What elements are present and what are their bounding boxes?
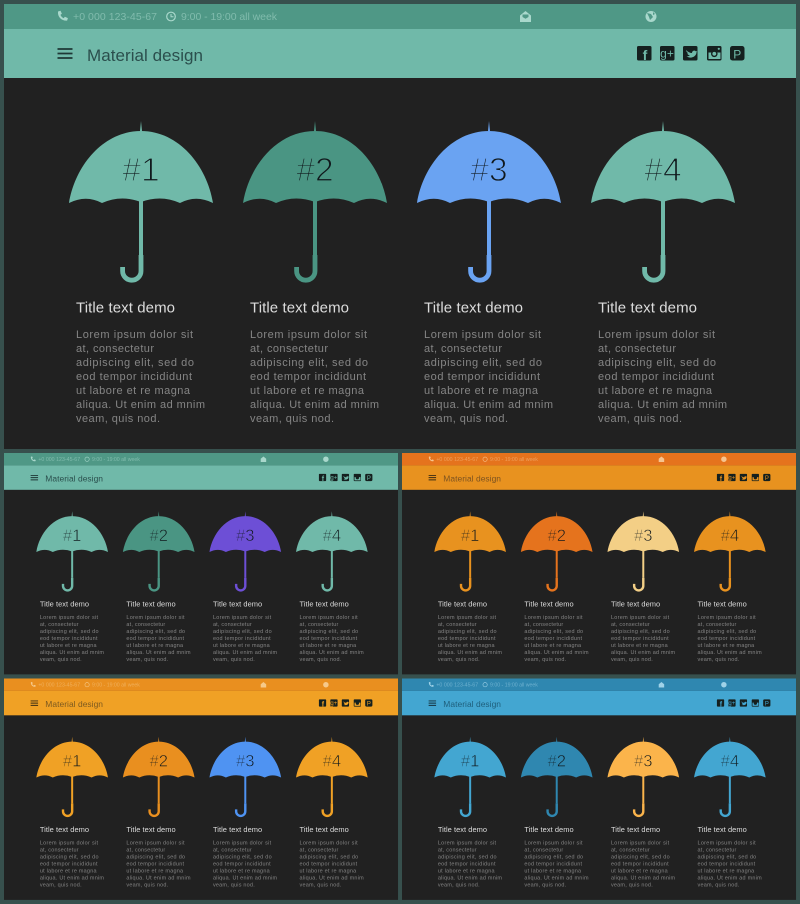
text block 1: at, consectetur (76, 343, 154, 355)
text block 4: adipiscing elit, sed do (698, 629, 756, 635)
text block 3: ut labore et re magna (213, 869, 271, 875)
text block 1: eod tempor incididunt (438, 636, 496, 642)
text block 1: Title text demo (40, 825, 89, 834)
text block 3: ut labore et re magna (213, 643, 271, 649)
text block 4: ut labore et re magna (698, 869, 755, 875)
app bar (402, 691, 796, 715)
text block 3: Lorem ipsum dolor sit (611, 841, 670, 847)
text block 2: eod tempor incididunt (250, 371, 366, 383)
text block 3: Title text demo (611, 825, 660, 834)
text block 4: veam, quis nod. (598, 413, 682, 425)
text block 4: ut labore et re magna (698, 643, 755, 649)
umbrella #3 (209, 511, 281, 590)
text block 2 (126, 825, 191, 888)
text block 4: at, consectetur (300, 848, 338, 854)
text block 3 (213, 825, 278, 888)
contact strip: +0 000 123-45-67 (38, 457, 80, 463)
text block 2: adipiscing elit, sed do (126, 629, 185, 635)
app bar: P (367, 476, 371, 482)
umbrella #1 (434, 511, 506, 590)
umbrella #1: #1 (63, 752, 81, 771)
text block 4: at, consectetur (698, 622, 736, 628)
text block 1: ut labore et re magna (76, 385, 191, 397)
text block 3: veam, quis nod. (611, 882, 653, 888)
text block 1: ut labore et re magna (438, 643, 495, 649)
text block 3: ut labore et re magna (424, 385, 539, 397)
umbrella #2 (521, 737, 593, 816)
umbrella #2: #2 (547, 752, 566, 771)
text block 4: Lorem ipsum dolor sit (698, 841, 756, 847)
text block 2 (126, 599, 191, 663)
text block 1: eod tempor incididunt (76, 371, 192, 383)
panel: small yellow layout (4, 678, 398, 900)
text block 1: veam, quis nod. (40, 657, 82, 663)
contact strip (402, 453, 796, 465)
text block 4: eod tempor incididunt (698, 636, 756, 642)
umbrella #1: #1 (63, 526, 81, 545)
text block 2: veam, quis nod. (126, 657, 169, 663)
text block 3: Title text demo (611, 599, 660, 608)
text block 3: aliqua. Ut enim ad mnim (213, 875, 278, 881)
contact strip: 9:00 - 19:00 all week (181, 11, 278, 23)
umbrella #3: #3 (236, 526, 255, 545)
panel: small teal and purple layout (4, 453, 398, 674)
text block 2: Lorem ipsum dolor sit (126, 841, 185, 847)
text block 2: Lorem ipsum dolor sit (126, 615, 185, 621)
text block 1: at, consectetur (40, 622, 79, 628)
text block 1: aliqua. Ut enim ad mnim (438, 650, 502, 656)
text block 4: adipiscing elit, sed do (300, 855, 358, 861)
text block 3: Lorem ipsum dolor sit (424, 329, 541, 341)
text block 1: veam, quis nod. (40, 882, 82, 888)
text block 2: eod tempor incididunt (126, 636, 185, 642)
text block 4: ut labore et re magna (300, 869, 357, 875)
text block 1: ut labore et re magna (40, 869, 97, 875)
contact strip: 9:00 - 19:00 all week (490, 682, 538, 688)
app bar: g+ (660, 46, 674, 60)
text block 2: adipiscing elit, sed do (524, 855, 583, 861)
text block 4: adipiscing elit, sed do (598, 357, 716, 369)
umbrella #2 (243, 121, 387, 280)
text block 2: ut labore et re magna (524, 643, 582, 649)
umbrella #2 (521, 511, 593, 590)
text block 4: adipiscing elit, sed do (698, 855, 756, 861)
text block 2: aliqua. Ut enim ad mnim (126, 875, 191, 881)
umbrella #3: #3 (634, 526, 653, 545)
text block 3: adipiscing elit, sed do (611, 629, 670, 635)
text block 2: at, consectetur (524, 622, 563, 628)
text block 2: ut labore et re magna (126, 869, 184, 875)
umbrella #3: #3 (470, 152, 508, 189)
text block 3 (611, 599, 676, 663)
umbrella #1 (69, 121, 213, 280)
app bar (4, 29, 796, 78)
umbrella #1: #1 (461, 752, 479, 771)
text block 2: Title text demo (524, 825, 574, 834)
panel: small blue layout (402, 678, 796, 900)
text block 2: at, consectetur (126, 622, 165, 628)
text block 4: Title text demo (698, 599, 747, 608)
text block 4: eod tempor incididunt (300, 636, 358, 642)
text block 4: veam, quis nod. (698, 657, 740, 663)
text block 1 (438, 599, 502, 663)
text block 1: Lorem ipsum dolor sit (40, 615, 98, 621)
text block 1: Title text demo (40, 599, 89, 608)
umbrella #2: #2 (296, 152, 334, 189)
text block 4 (300, 825, 364, 888)
umbrella #4 (296, 737, 368, 816)
text block 2: Lorem ipsum dolor sit (524, 841, 583, 847)
text block 4: eod tempor incididunt (300, 862, 358, 868)
text block 2: eod tempor incididunt (524, 862, 583, 868)
umbrella #4: #4 (721, 526, 739, 545)
text block 2: at, consectetur (524, 848, 563, 854)
text block 3: Lorem ipsum dolor sit (611, 615, 670, 621)
text block 1: aliqua. Ut enim ad mnim (40, 875, 104, 881)
text block 2: Title text demo (250, 300, 349, 316)
contact strip: +0 000 123-45-67 (38, 682, 80, 688)
text block 2: veam, quis nod. (126, 882, 169, 888)
umbrella #1: #1 (122, 152, 160, 189)
text block 2: Lorem ipsum dolor sit (524, 615, 583, 621)
text block 4: eod tempor incididunt (698, 862, 756, 868)
text block 1 (40, 825, 104, 888)
text block 4 (598, 300, 727, 425)
text block 4: aliqua. Ut enim ad mnim (300, 875, 364, 881)
text block 3: adipiscing elit, sed do (213, 629, 272, 635)
text block 1 (40, 599, 104, 663)
text block 1: adipiscing elit, sed do (40, 629, 99, 635)
text block 1: ut labore et re magna (40, 643, 97, 649)
text block 2: Title text demo (126, 599, 176, 608)
umbrella #4 (694, 511, 766, 590)
text block 1: at, consectetur (40, 848, 79, 854)
text block 4: Lorem ipsum dolor sit (300, 841, 358, 847)
umbrella #3 (209, 737, 281, 816)
text block 1: Lorem ipsum dolor sit (438, 841, 496, 847)
text block 4: at, consectetur (698, 848, 736, 854)
text block 4: adipiscing elit, sed do (300, 629, 358, 635)
text block 2: ut labore et re magna (524, 869, 582, 875)
app bar: Material design (45, 699, 103, 709)
text block 3: adipiscing elit, sed do (611, 855, 670, 861)
text block 3: adipiscing elit, sed do (213, 855, 272, 861)
text block 1: eod tempor incididunt (40, 636, 98, 642)
text block 4: Lorem ipsum dolor sit (598, 329, 715, 341)
text block 3: aliqua. Ut enim ad mnim (213, 650, 278, 656)
text block 2: veam, quis nod. (250, 413, 334, 425)
text block 4: Title text demo (598, 300, 697, 316)
text block 3 (611, 825, 676, 888)
text block 1: eod tempor incididunt (40, 862, 98, 868)
contact strip (402, 678, 796, 691)
text block 2: at, consectetur (126, 848, 165, 854)
text block 2: Title text demo (524, 599, 574, 608)
panel: large teal layout (4, 4, 796, 449)
text block 2: at, consectetur (250, 343, 328, 355)
contact strip (4, 453, 398, 465)
umbrella #2: #2 (149, 752, 168, 771)
app bar: P (765, 476, 769, 482)
text block 4: at, consectetur (300, 622, 338, 628)
text block 2: Title text demo (126, 825, 176, 834)
app bar: f (643, 47, 648, 63)
text block 2: aliqua. Ut enim ad mnim (524, 875, 589, 881)
app bar: P (733, 48, 741, 62)
app bar: f (720, 476, 723, 483)
panel background (4, 678, 398, 900)
app bar: f (322, 476, 325, 483)
text block 4: Lorem ipsum dolor sit (698, 615, 756, 621)
app bar: Material design (443, 699, 501, 709)
text block 3: eod tempor incididunt (611, 862, 669, 868)
contact strip: +0 000 123-45-67 (436, 457, 478, 463)
text block 4: veam, quis nod. (300, 882, 342, 888)
text block 1: adipiscing elit, sed do (438, 855, 497, 861)
text block 3: adipiscing elit, sed do (424, 357, 542, 369)
panel background (402, 453, 796, 674)
text block 1: Lorem ipsum dolor sit (76, 329, 193, 341)
text block 2: adipiscing elit, sed do (524, 629, 583, 635)
text block 4: aliqua. Ut enim ad mnim (698, 650, 762, 656)
text block 3: at, consectetur (213, 622, 252, 628)
umbrella #4: #4 (721, 752, 739, 771)
umbrella #2 (123, 737, 195, 816)
contact strip (4, 678, 398, 691)
contact strip: 9:00 - 19:00 all week (92, 457, 140, 463)
text block 3: aliqua. Ut enim ad mnim (424, 399, 553, 411)
text block 3: eod tempor incididunt (424, 371, 540, 383)
app bar: Material design (45, 473, 103, 483)
umbrella #2: #2 (149, 526, 168, 545)
text block 3: at, consectetur (611, 848, 650, 854)
text block 3: Title text demo (213, 599, 262, 608)
app bar (402, 465, 796, 490)
app bar: Material design (443, 473, 501, 483)
text block 1: Title text demo (438, 599, 487, 608)
contact strip: +0 000 123-45-67 (436, 682, 478, 688)
text block 3: Lorem ipsum dolor sit (213, 841, 272, 847)
text block 4 (698, 599, 762, 663)
text block 3: Title text demo (424, 300, 523, 316)
text block 3: veam, quis nod. (611, 657, 653, 663)
text block 1: Lorem ipsum dolor sit (438, 615, 496, 621)
text block 4: veam, quis nod. (300, 657, 342, 663)
text block 4: aliqua. Ut enim ad mnim (598, 399, 727, 411)
text block 2: adipiscing elit, sed do (250, 357, 368, 369)
umbrella #4: #4 (644, 152, 682, 189)
panel background (4, 4, 796, 449)
umbrella #1: #1 (461, 526, 479, 545)
text block 4: Title text demo (300, 599, 349, 608)
text block 1: adipiscing elit, sed do (438, 629, 497, 635)
text block 3: veam, quis nod. (213, 882, 255, 888)
text block 2 (524, 825, 589, 888)
text block 2 (524, 599, 589, 663)
umbrella #3 (607, 737, 679, 816)
app bar: g+ (330, 476, 338, 482)
contact strip: +0 000 123-45-67 (73, 11, 157, 23)
text block 4: aliqua. Ut enim ad mnim (300, 650, 364, 656)
text block 1 (438, 825, 502, 888)
text block 4: ut labore et re magna (300, 643, 357, 649)
umbrella #3 (417, 121, 561, 280)
app bar: f (322, 701, 325, 708)
text block 3 (424, 300, 553, 425)
text block 1: veam, quis nod. (438, 882, 480, 888)
panel background (4, 453, 398, 674)
text block 1: veam, quis nod. (76, 413, 160, 425)
text block 4: eod tempor incididunt (598, 371, 714, 383)
umbrella #3: #3 (634, 752, 653, 771)
text block 1: aliqua. Ut enim ad mnim (438, 875, 502, 881)
text block 3: Title text demo (213, 825, 262, 834)
text block 2: adipiscing elit, sed do (126, 855, 185, 861)
text block 1: Lorem ipsum dolor sit (40, 841, 98, 847)
umbrella #1 (434, 737, 506, 816)
text block 4: aliqua. Ut enim ad mnim (698, 875, 762, 881)
text block 3: eod tempor incididunt (611, 636, 669, 642)
text block 1: aliqua. Ut enim ad mnim (40, 650, 104, 656)
text block 3: aliqua. Ut enim ad mnim (611, 650, 676, 656)
app bar: g+ (330, 701, 338, 707)
text block 3: at, consectetur (213, 848, 252, 854)
umbrella #2 (123, 511, 195, 590)
contact strip (4, 4, 796, 29)
umbrella #4: #4 (323, 752, 341, 771)
umbrella #3: #3 (236, 752, 255, 771)
umbrella #4 (694, 737, 766, 816)
panel: small orange layout (402, 453, 796, 674)
text block 2: Lorem ipsum dolor sit (250, 329, 367, 341)
app bar (4, 465, 398, 490)
text block 1: veam, quis nod. (438, 657, 480, 663)
text block 1: aliqua. Ut enim ad mnim (76, 399, 205, 411)
app bar: g+ (728, 701, 736, 707)
text block 2 (250, 300, 379, 425)
umbrella #4 (591, 121, 735, 280)
panel background (402, 678, 796, 900)
text block 3: ut labore et re magna (611, 869, 669, 875)
text block 3: veam, quis nod. (213, 657, 255, 663)
text block 1: at, consectetur (438, 622, 477, 628)
app bar: P (765, 702, 769, 708)
text block 2: aliqua. Ut enim ad mnim (126, 650, 191, 656)
text block 3: at, consectetur (611, 622, 650, 628)
text block 4: ut labore et re magna (598, 385, 713, 397)
text block 2: eod tempor incididunt (126, 862, 185, 868)
text block 4: Title text demo (698, 825, 747, 834)
contact strip: 9:00 - 19:00 all week (92, 682, 140, 688)
umbrella #1 (36, 511, 108, 590)
app bar: g+ (728, 476, 736, 482)
text block 1: at, consectetur (438, 848, 477, 854)
contact strip: 9:00 - 19:00 all week (490, 457, 538, 463)
text block 2: ut labore et re magna (250, 385, 365, 397)
text block 2: aliqua. Ut enim ad mnim (524, 650, 589, 656)
text block 1 (76, 300, 205, 425)
umbrella #2: #2 (547, 526, 566, 545)
text block 4: veam, quis nod. (698, 882, 740, 888)
text block 3: Lorem ipsum dolor sit (213, 615, 272, 621)
umbrella #4 (296, 511, 368, 590)
text block 4: at, consectetur (598, 343, 676, 355)
text block 4 (698, 825, 762, 888)
text block 2: eod tempor incididunt (524, 636, 583, 642)
text block 3: eod tempor incididunt (213, 862, 271, 868)
text block 3: eod tempor incididunt (213, 636, 271, 642)
text block 4 (300, 599, 364, 663)
text block 2: ut labore et re magna (126, 643, 184, 649)
text block 3 (213, 599, 278, 663)
app bar: Material design (87, 46, 203, 65)
text block 2: veam, quis nod. (524, 882, 567, 888)
app bar: P (367, 702, 371, 708)
text block 1: Title text demo (438, 825, 487, 834)
text block 1: eod tempor incididunt (438, 862, 496, 868)
umbrella #4: #4 (323, 526, 341, 545)
text block 2: veam, quis nod. (524, 657, 567, 663)
text block 4: Title text demo (300, 825, 349, 834)
text block 3: at, consectetur (424, 343, 502, 355)
text block 3: ut labore et re magna (611, 643, 669, 649)
text block 1: ut labore et re magna (438, 869, 495, 875)
text block 4: Lorem ipsum dolor sit (300, 615, 358, 621)
umbrella #1 (36, 737, 108, 816)
umbrella #3 (607, 511, 679, 590)
text block 3: aliqua. Ut enim ad mnim (611, 875, 676, 881)
text block 2: aliqua. Ut enim ad mnim (250, 399, 379, 411)
app bar (4, 691, 398, 715)
text block 1: adipiscing elit, sed do (76, 357, 194, 369)
text block 1: adipiscing elit, sed do (40, 855, 99, 861)
text block 3: veam, quis nod. (424, 413, 508, 425)
text block 1: Title text demo (76, 300, 175, 316)
app bar: f (720, 701, 723, 708)
